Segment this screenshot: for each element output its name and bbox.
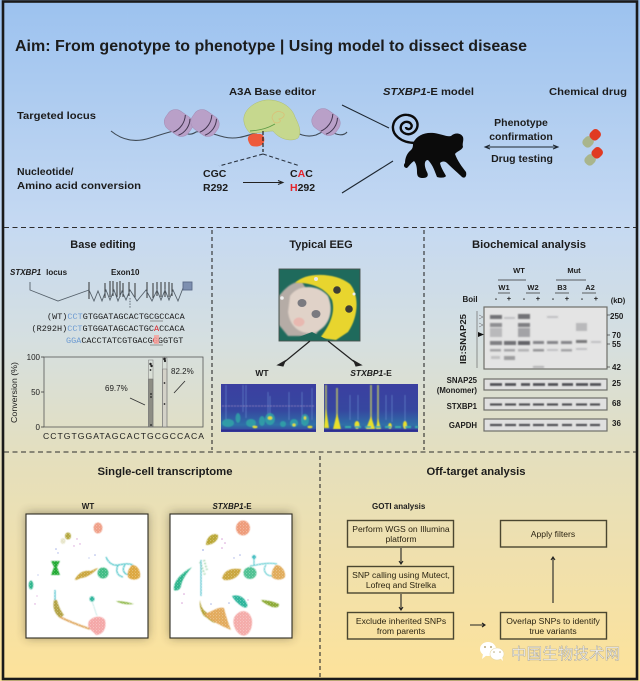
heading: Biochemical analysis [472, 239, 586, 251]
blot labels [462, 266, 626, 305]
flow box: overlap: true variants [529, 626, 577, 636]
arrows [278, 341, 361, 366]
flow box: SNP calling [348, 566, 454, 593]
western blot: SNAP25: 42 [612, 363, 621, 372]
bar chart: conversion: 50 [31, 388, 41, 397]
arrow: conversion [243, 180, 283, 184]
icon: base editor protein [244, 100, 300, 152]
flow arrows [399, 548, 555, 627]
watermark [480, 642, 620, 663]
phenotype and drug testing text: Drug testing [491, 153, 553, 165]
nucleotide conversion text: H292 [290, 182, 315, 194]
label: nucleotide conversion: Amino acid conversion [17, 180, 141, 192]
blot labels: - [495, 294, 498, 303]
flow box: overlap [500, 612, 606, 639]
labels: WT [82, 502, 94, 511]
heading: Base editing [70, 239, 136, 251]
label: nucleotide conversion [17, 166, 141, 192]
western blot: STXBP1: STXBP1 [447, 402, 478, 411]
gene locus labels: Exon10 [111, 268, 140, 277]
western blot: GAPDH: GAPDH [449, 421, 477, 430]
panel: aim workflow [17, 86, 627, 194]
blot labels: Boil [462, 295, 478, 304]
western blot: SNAP25 [459, 307, 624, 372]
subheading: GOTI analysis [372, 502, 426, 511]
blot labels: - [523, 294, 526, 303]
western blot: STXBP1 [447, 398, 621, 411]
western blot: STXBP1: 68 [612, 399, 621, 408]
icon: nucleosomes [161, 105, 344, 140]
flow box: exclude [348, 612, 454, 639]
flow box: SNP calling: SNP calling using Mutect, [352, 570, 450, 580]
bar chart: conversion: CCTGTGGATAGCACTGCGCCACA [43, 431, 204, 441]
chart: WT spectrogram [221, 384, 316, 432]
icon: wechat [480, 642, 504, 661]
bar chart: conversion: 100 [27, 353, 41, 362]
western blot: SNAP25 monomer: (Monomer) [437, 386, 477, 395]
blot labels: WT [513, 266, 525, 275]
sequence alignment: (R292H)CCTGTGGATAGCACTGCACCACA [32, 324, 185, 334]
bar chart: conversion: 69.7% [105, 384, 128, 393]
sequence alignment: GGACACCTATCGTGACGGGGTGT [66, 336, 183, 346]
label: nucleotide conversion: Nucleotide/ [17, 166, 74, 178]
blot labels: - [581, 294, 584, 303]
flow box: filters: Apply filters [531, 529, 575, 539]
heading: chemical drug: Chemical drug [549, 86, 627, 98]
flow box: overlap: Overlap SNPs to identify [506, 616, 601, 626]
bar chart: conversion: 82.2% [171, 367, 194, 376]
gene structure [30, 281, 192, 308]
flow box: WGS [348, 520, 454, 547]
sequence alignment: (WT)CCTGTGGATAGCACTGCGCCACA [47, 312, 186, 322]
blot labels: Mut [567, 266, 581, 275]
heading: Single-cell transcriptome [98, 466, 232, 478]
panel: biochemical analysis [437, 239, 626, 431]
western blot: SNAP25: 70 [612, 331, 621, 340]
blot labels: + [507, 294, 512, 303]
western blot: SNAP25 monomer: 25 [612, 379, 621, 388]
labels: STXBP1-E [350, 368, 392, 378]
heading: Typical EEG [289, 239, 353, 251]
panel: off-target analysis [348, 466, 606, 639]
western blot: SNAP25: IB:SNAP25 [459, 313, 468, 364]
western blot: GAPDH: 36 [612, 419, 621, 428]
blot labels: - [552, 294, 555, 303]
western blot: GAPDH [449, 419, 621, 431]
blot labels: B3 [557, 283, 567, 292]
flow box: exclude: Exclude inherited SNPs [356, 616, 446, 626]
icon: pills [581, 127, 605, 167]
panel: base editing [9, 239, 204, 441]
panel: single-cell transcriptome [26, 466, 292, 638]
flow box: exclude: from parents [377, 626, 425, 636]
blot labels: A2 [585, 283, 595, 292]
phenotype and drug testing text: confirmation [489, 131, 553, 143]
nucleotide conversion text: R292 [203, 182, 228, 194]
phenotype and drug testing text: Phenotype [494, 117, 548, 129]
blot labels: + [536, 294, 541, 303]
flow box: WGS: platform [385, 534, 417, 544]
western blot: SNAP25: 55 [612, 340, 621, 349]
nucleotide conversion text [203, 168, 315, 194]
bar chart: conversion: Conversion (%) [9, 362, 19, 423]
label: targeted locus: Targeted locus [17, 110, 96, 122]
heading: A3A base editor: A3A Base editor [229, 86, 316, 98]
nucleotide conversion text: CAC [290, 168, 313, 180]
western blot: SNAP25 monomer [437, 376, 621, 395]
blot labels: + [594, 294, 599, 303]
heading: Off-target analysis [426, 466, 526, 478]
blot labels: W2 [527, 283, 539, 292]
flow box: filters [500, 520, 606, 547]
pointer lines [342, 105, 393, 193]
arrow: two way [485, 145, 558, 149]
labels: WT [255, 368, 269, 378]
gene locus labels: STXBP1 locus [10, 268, 68, 277]
chart: WT UMAP [26, 513, 148, 638]
chart: STXBP1-E spectrogram [324, 384, 418, 432]
title: Aim: From genotype to phenotype | Using model to dissect disease [15, 38, 527, 55]
blot labels: (kD) [611, 296, 626, 305]
blot labels: + [565, 294, 570, 303]
phenotype and drug testing text [489, 117, 553, 165]
gene locus labels [10, 268, 140, 277]
western blot: SNAP25 monomer: SNAP25 [447, 376, 478, 385]
labels: STXBP1-E [212, 502, 252, 511]
bar chart: conversion [9, 353, 204, 441]
flow box: SNP calling: Lofreq and Strelka [366, 580, 436, 590]
labels [255, 368, 392, 378]
nucleotide conversion text: CGC [203, 168, 227, 180]
DNA strand [111, 128, 347, 140]
heading: model: STXBP1 -E model [383, 86, 474, 98]
bar chart: conversion: 0 [36, 423, 41, 432]
labels [82, 502, 252, 511]
blot labels: W1 [498, 283, 510, 292]
chart: STXBP1-E UMAP [170, 513, 292, 638]
sequence alignment [32, 312, 186, 346]
western blot: SNAP25: 250 [610, 312, 624, 321]
photo: monkey with EEG cap [279, 269, 360, 341]
icon: monkey [393, 115, 466, 178]
panel: typical EEG [221, 239, 418, 432]
flow box: WGS: Perform WGS on Illumina [352, 524, 450, 534]
watermark text: 中国生物技术网 [511, 645, 620, 663]
